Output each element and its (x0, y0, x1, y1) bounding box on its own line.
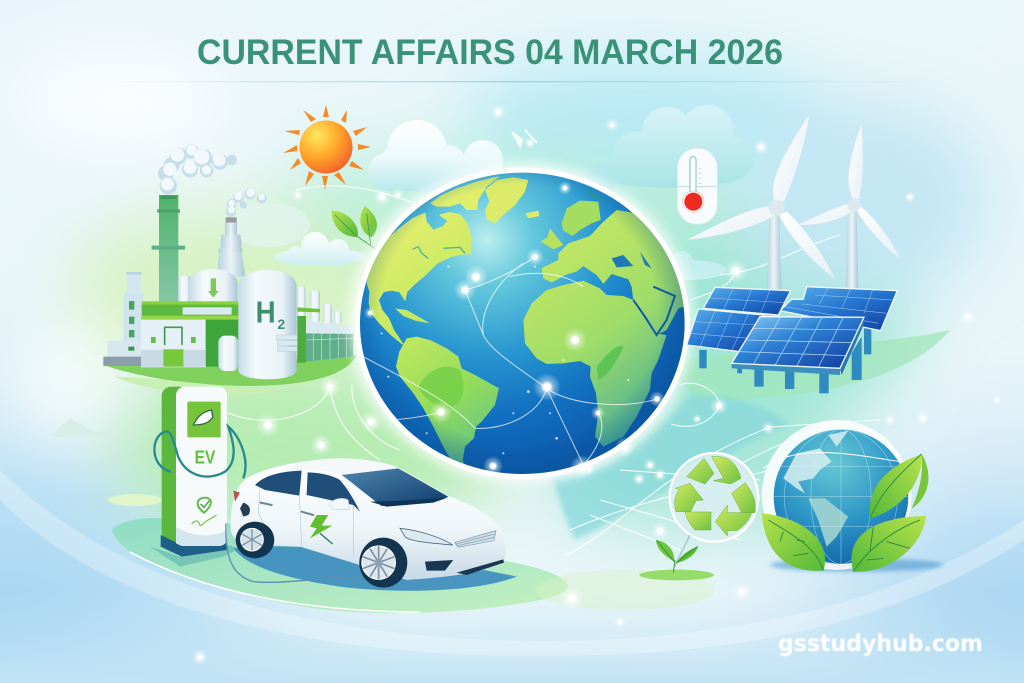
continent: europe and asia (542, 210, 693, 335)
mid tank (189, 269, 238, 303)
H2 tank (238, 270, 297, 379)
green building (142, 303, 239, 317)
right annex (306, 321, 353, 362)
electric car (226, 458, 505, 588)
turbine: rear (796, 123, 901, 290)
clouds (226, 105, 754, 280)
body details (258, 490, 353, 557)
sparkles: network nodes (192, 104, 1002, 665)
cable (154, 427, 245, 478)
ground: car (112, 518, 568, 613)
background cylinders (178, 276, 341, 324)
wind turbines (687, 114, 901, 290)
panel: back right (780, 287, 897, 331)
grey stack (217, 217, 245, 277)
continent: south america (396, 337, 499, 477)
ground (103, 355, 357, 386)
wheels (236, 522, 274, 558)
panel: back left (687, 287, 791, 352)
sprout (639, 540, 714, 580)
teal network swoosh (552, 395, 790, 540)
panel: front (732, 317, 864, 375)
icon: sun (283, 105, 371, 190)
turbine: front (687, 114, 835, 290)
windows (342, 468, 448, 506)
icon: thermometer (677, 148, 717, 224)
recycling symbol (639, 453, 758, 580)
continent: africa (523, 281, 667, 447)
watermark: gsstudyhub.com (778, 631, 983, 657)
globe (350, 163, 694, 483)
small earth with leaves (762, 420, 943, 572)
continent: north america (367, 213, 471, 344)
leaves (762, 454, 928, 572)
cloud: right of globe (587, 105, 754, 193)
label: EV: EV (195, 447, 216, 468)
panel legs (699, 328, 871, 393)
factory: hydrogen plant (103, 144, 357, 395)
side tower (127, 273, 141, 294)
small tank (218, 336, 238, 371)
pale swooshes (0, 470, 1024, 656)
factory: hydrogen plant: 2 (277, 316, 285, 332)
icon: twin leaves (332, 206, 377, 249)
network lines (228, 186, 880, 555)
title: CURRENT AFFAIRS 04 MARCH 2026 (197, 32, 783, 72)
network on globe (350, 257, 657, 465)
cloud: near leaves (274, 232, 366, 266)
cloud: left of globe (368, 120, 503, 192)
chimney (159, 195, 178, 302)
headlight and grille (400, 528, 453, 545)
solar panels (687, 287, 897, 393)
wisp (512, 130, 537, 146)
greenland and iceland (485, 177, 539, 223)
factory: hydrogen plant: H (256, 296, 276, 330)
smoke (158, 144, 267, 217)
ev charger (150, 387, 517, 591)
